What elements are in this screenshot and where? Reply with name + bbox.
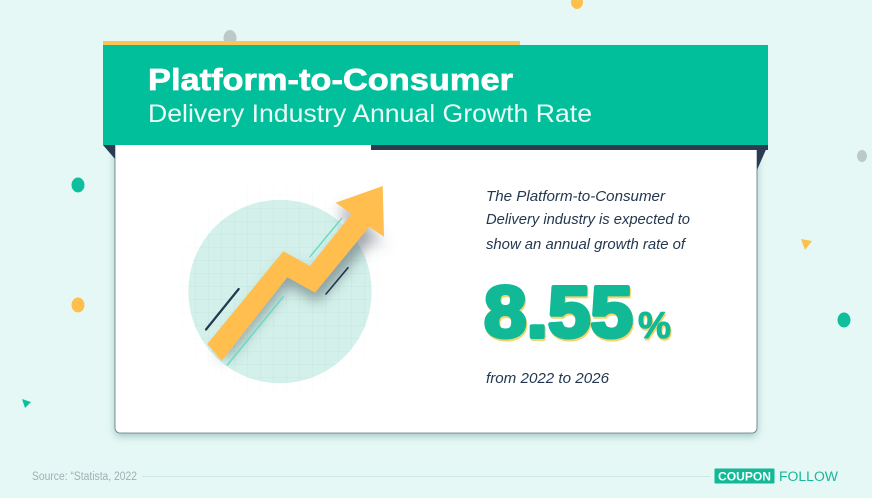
banner subtitle: Delivery Industry Annual Growth Rate: [148, 100, 592, 128]
accent lines: [206, 218, 348, 365]
CouponFollow logo: [714, 468, 838, 484]
teal circle: [188, 200, 372, 383]
white content card: [115, 140, 757, 433]
intro text: [486, 189, 690, 253]
yellow rising arrow: [207, 186, 384, 361]
decorative confetti shapes: [22, 0, 867, 408]
title banner: [103, 41, 768, 145]
footer rule: [142, 476, 710, 478]
intro text: Delivery industry is expected to: [486, 212, 690, 228]
CouponFollow logo: FOLLOW: [779, 469, 838, 484]
big statistic 8.55%: 8.55: [485, 275, 634, 355]
intro text: show an annual growth rate of: [486, 237, 687, 253]
banner fold corners and dark stripe: [103, 145, 768, 170]
illustration: growth arrow on circle: [182, 186, 386, 390]
intro text: The Platform-to-Consumer: [486, 189, 666, 205]
big statistic 8.55%: %: [639, 307, 672, 348]
period text: from 2022 to 2026: [486, 371, 609, 387]
big statistic 8.55%: 8.55: [484, 273, 633, 353]
arrow shadow: [218, 205, 386, 360]
CouponFollow logo: COUPON: [718, 470, 771, 484]
title heading: Platform-to-Consumer: [148, 62, 513, 97]
source note: Source: “Statista, 2022: [32, 471, 137, 483]
big statistic 8.55%: %: [638, 305, 671, 346]
